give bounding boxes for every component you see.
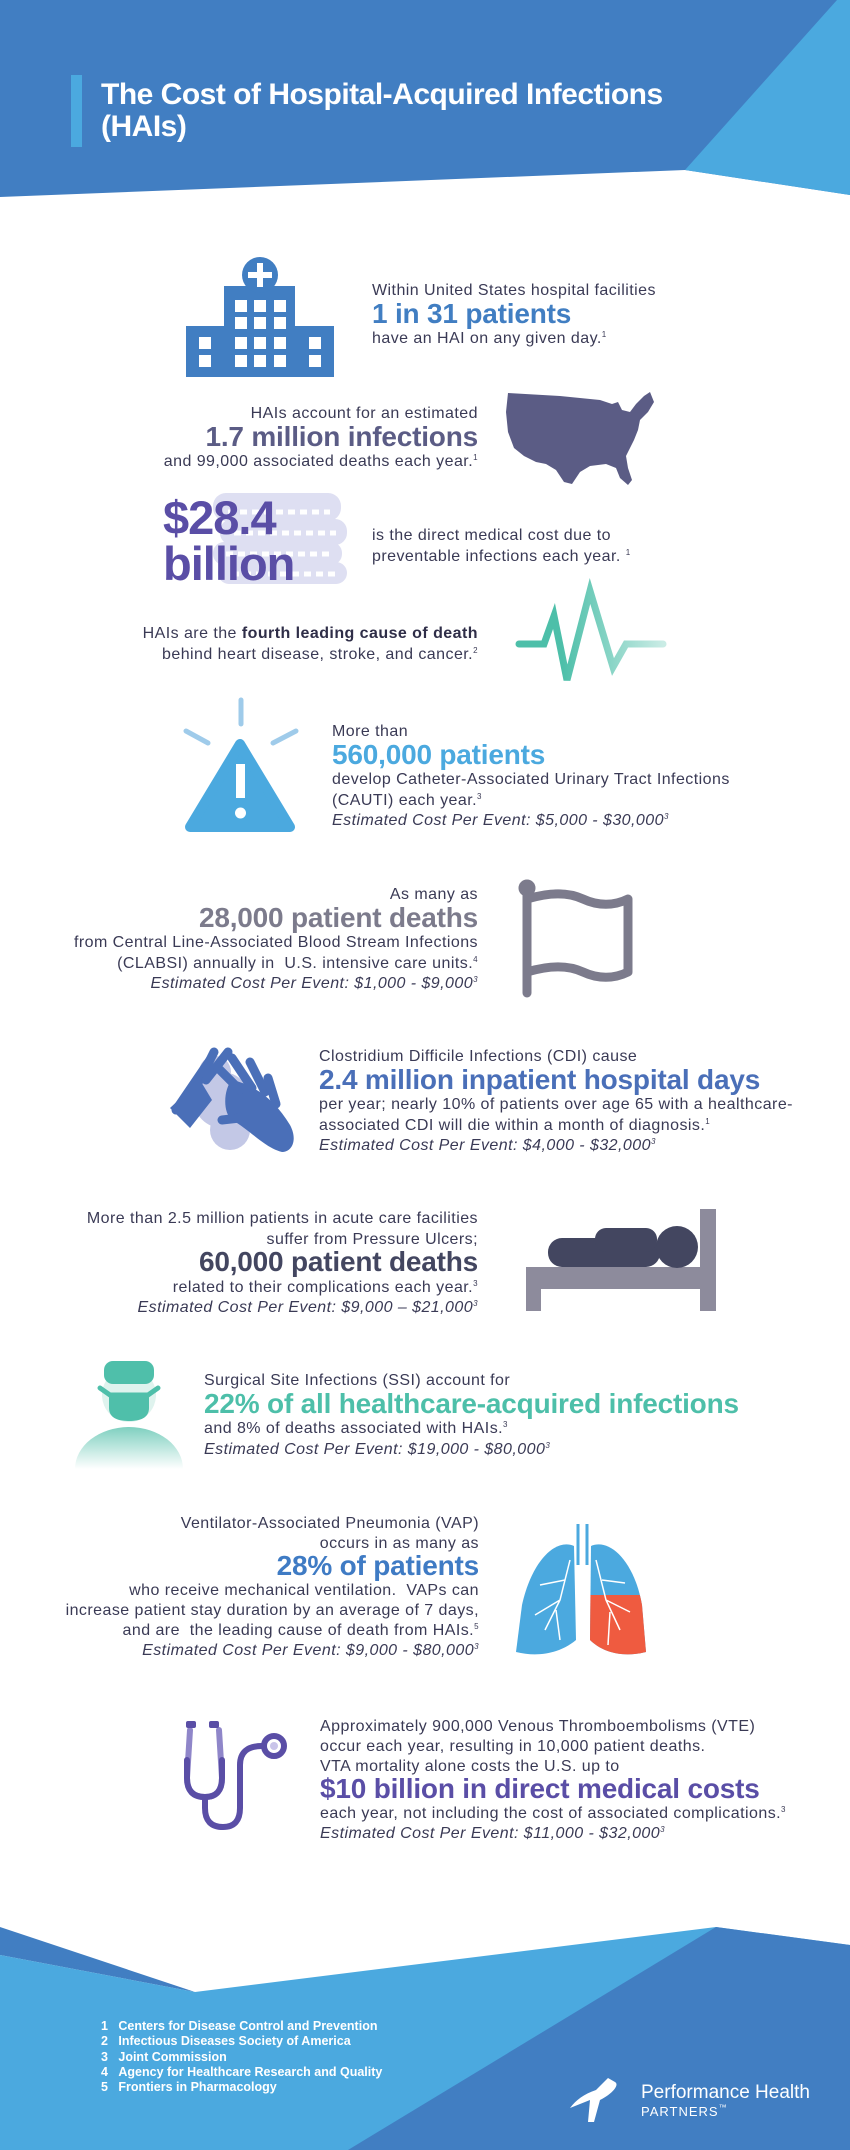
text: CAUTI: (CAUTI) each year.3 xyxy=(332,792,482,808)
text: 1 in 31: Within United States hospital facilities xyxy=(372,282,656,299)
text: CDI xyxy=(319,1048,793,1154)
text: VTE: VTA mortality alone costs the U.S. up to xyxy=(320,1758,620,1775)
text: CAUTI: develop Catheter-Associated Urinary Tract Infections xyxy=(332,771,730,788)
icon: patient in bed xyxy=(526,1209,716,1311)
text: VAP: and are the leading cause of death from HAIs.5 xyxy=(123,1622,479,1639)
text: SSI: Estimated Cost Per Event: $19,000 - $80,0003 xyxy=(204,1440,550,1458)
text: fourth leading cause xyxy=(143,625,478,662)
text: fourth leading cause: behind heart disease, stroke, and cancer.2 xyxy=(162,646,478,662)
text: CDI: 2.4 million inpatient hospital days xyxy=(319,1064,760,1094)
text: VAP: who receive mechanical ventilation. VAPs can xyxy=(129,1582,479,1599)
references: 5 Frontiers in Pharmacology xyxy=(101,2080,277,2094)
text: SSI: 22% of all healthcare-acquired infections xyxy=(204,1388,739,1418)
text: SSI: Surgical Site Infections (SSI) account for xyxy=(204,1372,510,1389)
icon: logo mark xyxy=(570,2078,617,2122)
text: $28.4 billion: billion xyxy=(163,537,294,590)
text: CDI: per year; nearly 10% of patients over age 65 with a healthcare- xyxy=(319,1096,793,1113)
references xyxy=(101,2019,382,2094)
footer background xyxy=(0,1927,850,2150)
references: 3 Joint Commission xyxy=(101,2050,227,2064)
title: The Cost of Hospital-Acquired Infections xyxy=(101,78,663,111)
text: direct medical cost: preventable infections each year. 1 xyxy=(372,548,631,564)
text: fourth leading cause: HAIs are the fourth leading cause of death xyxy=(143,625,478,642)
icon: warning xyxy=(186,700,296,827)
text: 1.7 million: and 99,000 associated deaths each year.1 xyxy=(164,453,478,470)
text: CAUTI: More than xyxy=(332,723,408,740)
text: SSI: and 8% of deaths associated with HAIs.3 xyxy=(204,1420,508,1437)
logo text xyxy=(641,2082,810,2119)
text: CAUTI: 560,000 patients xyxy=(332,738,545,770)
text: CAUTI: Estimated Cost Per Event: $5,000 - $30,0003 xyxy=(332,812,669,829)
text: pressure ulcers: 60,000 patient deaths xyxy=(199,1246,478,1277)
text: CDI: Estimated Cost Per Event: $4,000 - $32,0003 xyxy=(319,1137,656,1154)
text: CLABSI: (CLABSI) annually in U.S. intensive care units.4 xyxy=(117,954,478,972)
icon: lungs xyxy=(516,1524,646,1654)
logo text: Performance Health xyxy=(641,2082,810,2103)
icon: surgeon xyxy=(75,1361,183,1469)
text: CDI: associated CDI will die within a month of diagnosis.1 xyxy=(319,1116,710,1134)
icon: stethoscope xyxy=(186,1721,284,1827)
text: CLABSI: As many as xyxy=(390,886,478,903)
text: pressure ulcers xyxy=(87,1210,478,1316)
text: CLABSI: Estimated Cost Per Event: $1,000 - $9,0003 xyxy=(150,975,478,992)
text: pressure ulcers: suffer from Pressure Ulcers; xyxy=(267,1230,478,1248)
text: 1 in 31: 1 in 31 patients xyxy=(372,298,571,328)
text: VTE: occur each year, resulting in 10,000 patient deaths. xyxy=(320,1738,705,1755)
text: VAP: Estimated Cost Per Event: $9,000 - $80,0003 xyxy=(142,1642,479,1659)
text: pressure ulcers: related to their complications each year.3 xyxy=(173,1278,478,1296)
icon: flag xyxy=(523,884,628,993)
text: $28.4 billion: $28.4 xyxy=(163,491,276,544)
text: VAP: increase patient stay duration by an average of 7 days, xyxy=(66,1602,479,1619)
text: 1 in 31 xyxy=(372,282,656,347)
text: VTE: each year, not including the cost of associated complications.3 xyxy=(320,1805,786,1822)
text: pressure ulcers: More than 2.5 million patients in acute care facilities xyxy=(87,1210,478,1227)
text: CLABSI: from Central Line-Associated Blood Stream Infections xyxy=(74,934,478,951)
text: CLABSI xyxy=(74,886,478,992)
text: VTE xyxy=(320,1718,786,1842)
text: VTE: Approximately 900,000 Venous Thromboembolisms (VTE) xyxy=(320,1718,755,1735)
references: 2 Infectious Diseases Society of America xyxy=(101,2034,351,2048)
title: (HAIs) xyxy=(101,110,186,143)
text: 1.7 million xyxy=(164,405,478,470)
logo text: PARTNERS™ xyxy=(641,2103,728,2119)
text: VAP: Ventilator-Associated Pneumonia (VAP) xyxy=(181,1515,479,1532)
icon: coins xyxy=(213,493,347,584)
text: 1.7 million: HAIs account for an estimated xyxy=(251,405,478,422)
icon: hospital xyxy=(186,257,334,377)
icon: US map xyxy=(506,392,654,485)
text: $28.4 billion xyxy=(163,491,294,590)
icon: heartbeat xyxy=(519,591,663,680)
text: CAUTI xyxy=(332,723,730,829)
text: VAP: 28% of patients xyxy=(277,1550,479,1581)
header background xyxy=(0,0,850,197)
title xyxy=(71,75,663,147)
text: CDI: Clostridium Difficile Infections (CDI) cause xyxy=(319,1048,637,1065)
text: direct medical cost: is the direct medical cost due to xyxy=(372,527,611,544)
text: VAP: occurs in as many as xyxy=(320,1535,479,1552)
text: VAP xyxy=(66,1515,479,1659)
references: 1 Centers for Disease Control and Prevention xyxy=(101,2019,377,2033)
references: 4 Agency for Healthcare Research and Quality xyxy=(101,2065,382,2079)
icon: hands xyxy=(170,1052,294,1152)
text: pressure ulcers: Estimated Cost Per Event: $9,000 – $21,0003 xyxy=(138,1299,478,1316)
text: SSI xyxy=(204,1372,739,1458)
text: 1.7 million: 1.7 million infections xyxy=(205,420,478,452)
text: VTE: Estimated Cost Per Event: $11,000 - $32,0003 xyxy=(320,1825,665,1842)
text: VTE: $10 billion in direct medical costs xyxy=(320,1773,760,1804)
text: direct medical cost xyxy=(372,527,631,564)
text: 1 in 31: have an HAI on any given day.1 xyxy=(372,330,607,347)
text: CLABSI: 28,000 patient deaths xyxy=(199,902,478,932)
